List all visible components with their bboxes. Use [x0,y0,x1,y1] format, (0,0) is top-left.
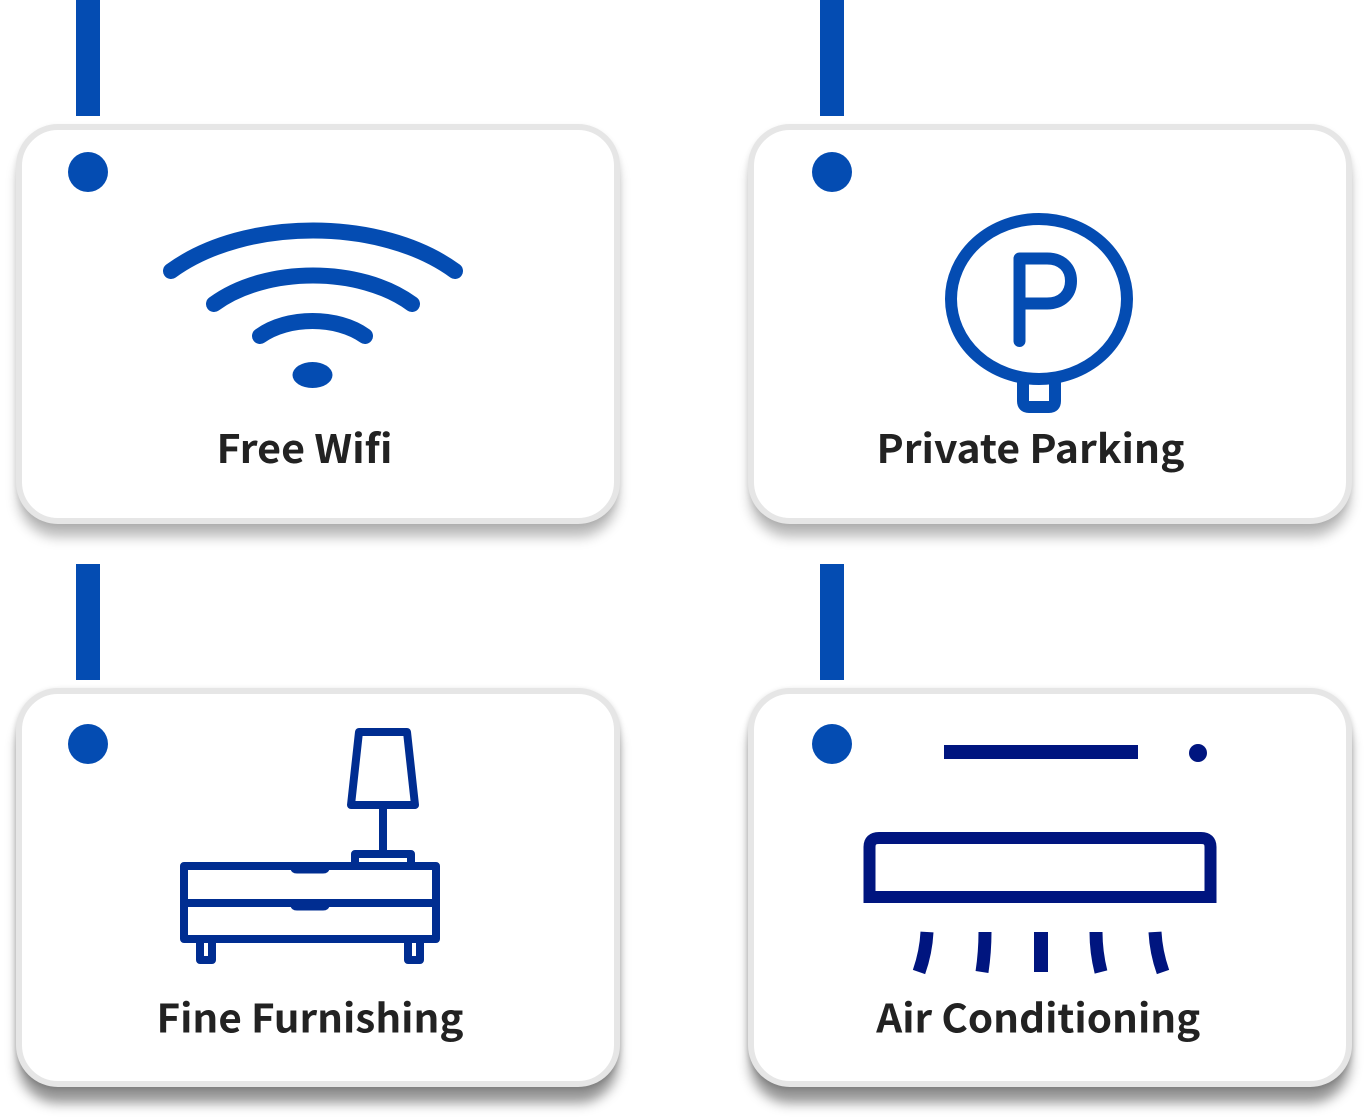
heading: private parking: Private Parking [876,419,1184,475]
icon: parking sign [951,219,1127,407]
panel: free wifi card [16,124,620,524]
connector bar: bottom right [820,564,844,680]
heading: air conditioning: Air Conditioning [875,988,1200,1044]
heading: fine furnishing: Fine Furnishing [156,988,463,1044]
connector bar: top right [820,0,844,116]
dot: fine furnishing [68,724,108,764]
panel: fine furnishing card [16,688,620,1087]
heading: free wifi: Free Wifi [216,419,392,475]
icon: wifi [171,230,455,388]
icon: air conditioner [870,744,1210,972]
icon: cabinet with lamp [184,732,436,960]
connector bar: top left [76,0,100,116]
dot: private parking [812,152,852,192]
dot: air conditioning [812,724,852,764]
connector bar: bottom left [76,564,100,680]
panel: private parking card [748,124,1352,524]
dot: free wifi [68,152,108,192]
panel: air conditioning card [748,688,1352,1087]
